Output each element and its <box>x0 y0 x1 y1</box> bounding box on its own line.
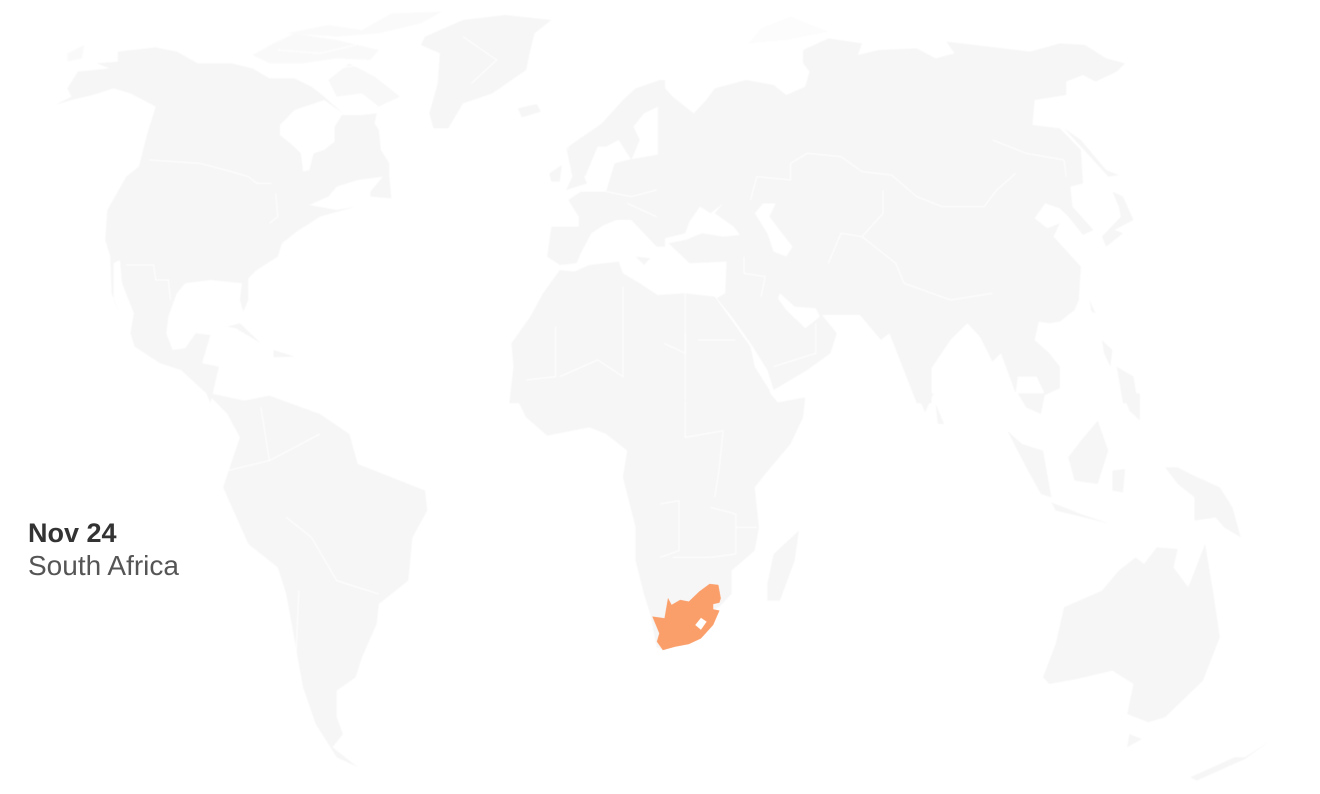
landmass: north america, greenland and west europe <box>55 12 665 403</box>
date: Nov 24 <box>28 518 117 548</box>
country name: South Africa <box>28 550 179 581</box>
country borders <box>126 37 1066 687</box>
landmass: south america and africa west <box>206 392 665 767</box>
landmass: asia and north-east africa <box>658 17 1138 403</box>
highlighted country: south africa <box>652 584 721 650</box>
label: date and country <box>28 518 179 581</box>
landmass: southern africa, southeast asia and oceania <box>658 392 1270 781</box>
